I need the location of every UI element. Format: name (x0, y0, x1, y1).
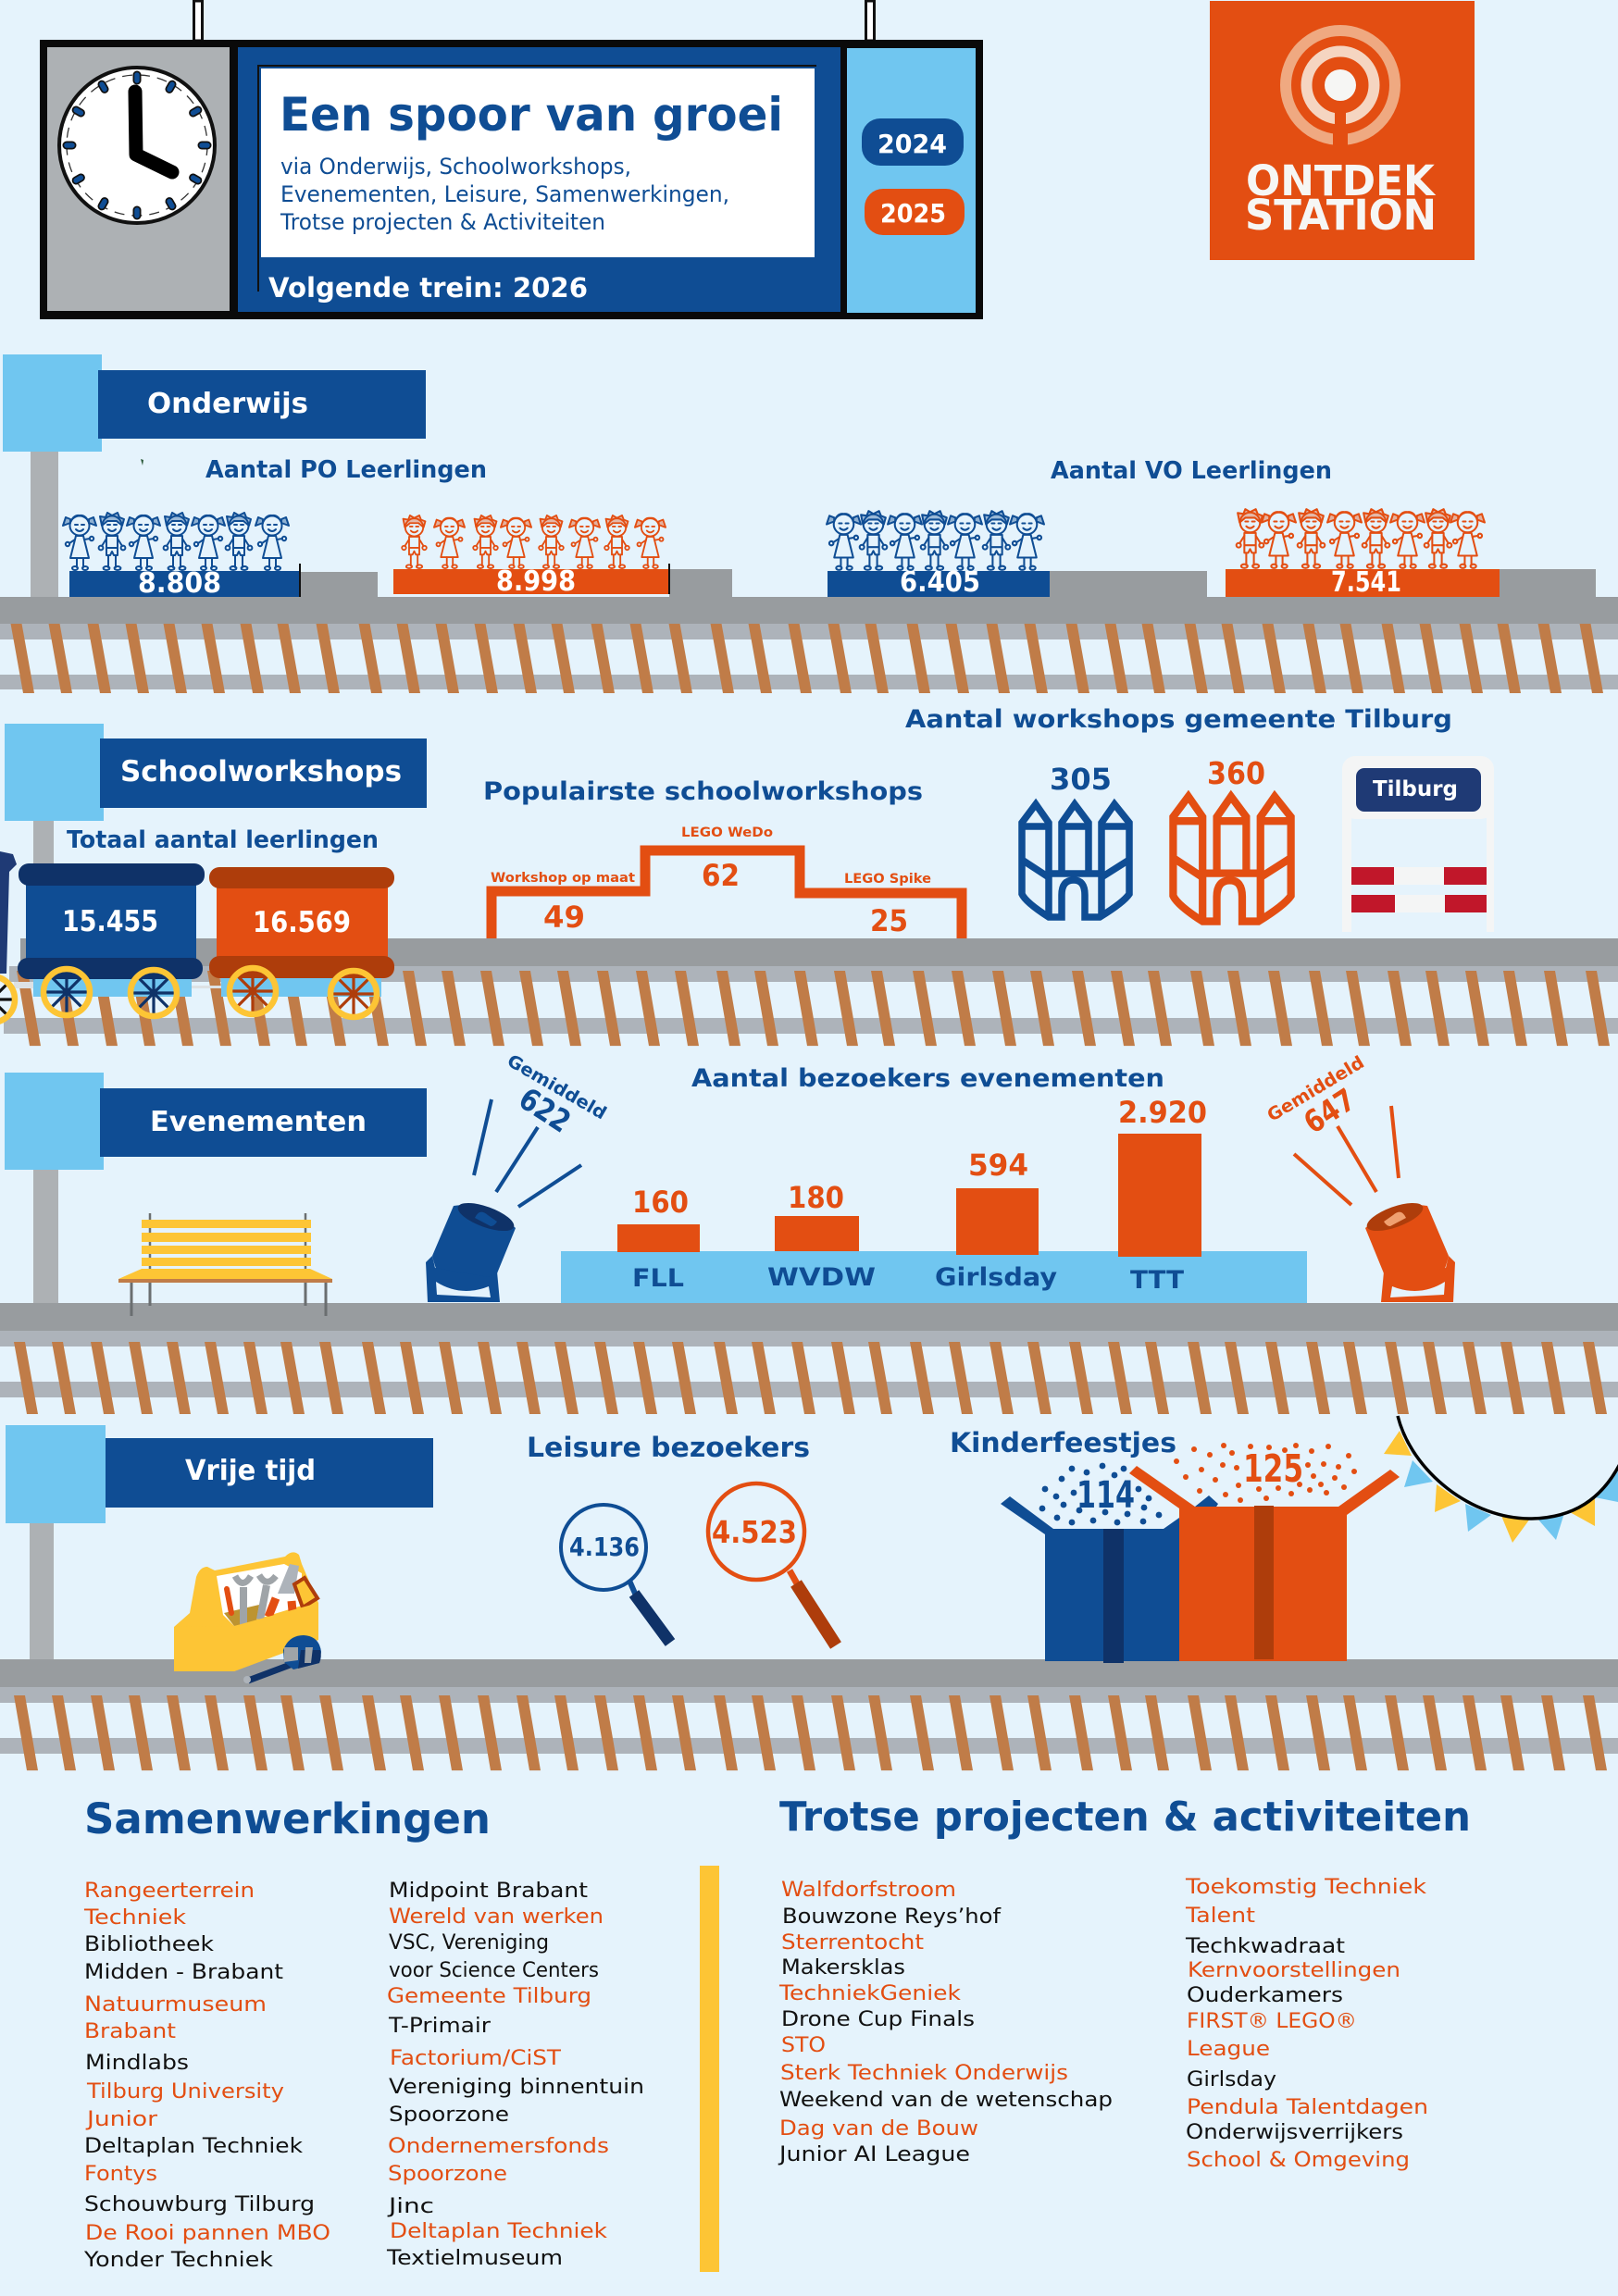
white title box (258, 66, 816, 292)
heading VO: Aantal VO Leerlingen (1051, 457, 1332, 485)
sign post (33, 821, 54, 938)
sign (3, 354, 426, 452)
list: Trotse projecten column 1: Sterrentocht (781, 1931, 924, 1955)
clock panel (47, 47, 230, 311)
list: Samenwerkingen column 2: voor Science Centers (389, 1959, 599, 1982)
heading events: Aantal bezoekers evenementen (691, 1064, 1164, 1093)
bar chart events: TTT (1130, 1266, 1185, 1295)
sign: Onderwijs (147, 388, 308, 420)
list: Trotse projecten column 1: Weekend van de wetenschap (779, 2089, 1113, 2112)
icon: magnifier orange (708, 1483, 836, 1645)
bar chart events: WVDW (767, 1263, 876, 1292)
sign (5, 724, 427, 821)
icon: magnifier orange: 4.523 (712, 1514, 797, 1550)
icon: gift blue: 114 (1077, 1474, 1135, 1517)
list: Samenwerkingen column 2: Midpoint Brabant (389, 1880, 588, 1903)
list: Trotse projecten column 2: Talent (1185, 1905, 1255, 1928)
list: Samenwerkingen column 1: Natuurmuseum (84, 1993, 267, 2017)
confetti blue (1039, 1463, 1162, 1525)
bar VO 2024: 6.405 (900, 566, 980, 599)
next train text: Volgende trein: 2026 (268, 272, 588, 304)
heading total: Totaal aantal leerlingen (67, 826, 379, 854)
bar chart events (617, 1095, 1207, 1295)
list: Samenwerkingen column 1: Bibliotheek (84, 1933, 214, 1956)
sign post (30, 1523, 54, 1659)
list: Trotse projecten column 1 (778, 1879, 1113, 2166)
bar PO 2024: 8.808 (138, 567, 221, 600)
wagon orange (209, 867, 394, 1017)
wagon blue (18, 863, 205, 1016)
bar PO 2025: 8.998 (496, 565, 576, 598)
sign (6, 1425, 433, 1523)
list: Trotse projecten column 1: STO (781, 2034, 826, 2057)
list: Samenwerkingen column 2: Textielmuseum (386, 2247, 563, 2270)
bar VO 2025 (1226, 566, 1596, 599)
list: Trotse projecten column 2: Onderwijsverrijkers (1186, 2121, 1403, 2144)
sign: Evenementen (150, 1106, 367, 1138)
label Gemiddeld blue: Gemiddeld (504, 1050, 610, 1123)
icon: bunting (1384, 1416, 1618, 1543)
list: Trotse projecten column 1: Walfdorfstroom (781, 1879, 956, 1902)
sign: Vrije tijd (185, 1455, 316, 1487)
panel: Evenementen (0, 1050, 1618, 1414)
icon: children VO 2024 (827, 511, 1044, 570)
value 360: 360 (1207, 755, 1265, 791)
icon: toolbox (174, 1552, 321, 1683)
list: Samenwerkingen column 2: T-Primair (388, 2015, 492, 2038)
label Gemiddeld orange: Gemiddeld (1263, 1052, 1368, 1126)
list: Samenwerkingen column 1: Schouwburg Tilburg (84, 2193, 315, 2216)
track (0, 1659, 1618, 1770)
divider bar (700, 1866, 719, 2272)
label Gemiddeld blue: 622 (513, 1080, 578, 1140)
podium chart: LEGO WeDo (681, 825, 773, 840)
list: Trotse projecten column 2: Techkwadraat (1185, 1935, 1345, 1958)
subtitle: via Onderwijs, Schoolworkshops, (280, 154, 631, 180)
sign (5, 1073, 427, 1170)
list: Samenwerkingen column 1: De Rooi pannen MBO (85, 2222, 330, 2245)
station sign Tilburg: Tilburg (1373, 777, 1458, 801)
bar VO 2025: 7.541 (1331, 566, 1401, 599)
list: Samenwerkingen column 1: Brabant (84, 2020, 176, 2043)
list: Trotse projecten column 2: School & Omgeving (1187, 2149, 1410, 2172)
podium chart: 62 (702, 858, 740, 893)
year panel (847, 48, 976, 313)
list: Trotse projecten column 1: Dag van de Bouw (779, 2117, 978, 2141)
list: Trotse projecten column 2: League (1187, 2038, 1270, 2061)
blue display panel (238, 47, 840, 312)
icon: children PO 2025 (402, 515, 666, 568)
podium chart: 49 (543, 900, 585, 935)
list: Samenwerkingen column 1: Deltaplan Techniek (84, 2135, 303, 2158)
panel: Schoolworkshops (0, 705, 1618, 1046)
logo: Ontdek Station: STATION (1245, 191, 1437, 240)
station sign Tilburg (1342, 756, 1494, 932)
coupling (192, 986, 223, 988)
confetti orange (1174, 1443, 1357, 1503)
list: Trotse projecten column 1: Junior AI League (778, 2143, 970, 2166)
list: Samenwerkingen column 1: Fontys (84, 2163, 157, 2186)
icon: magnifier blue (561, 1505, 670, 1643)
list: Samenwerkingen column 2: Wereld van werken (389, 1905, 604, 1929)
list: Samenwerkingen column 2: Gemeente Tilburg (387, 1985, 591, 2008)
year pill 2025: 2025 (880, 198, 946, 229)
panel: station board header (40, 1, 983, 319)
list: Samenwerkingen column 2: Factorium/CiST (390, 2047, 562, 2070)
wagon blue: 15.455 (62, 905, 158, 938)
train (0, 851, 394, 1023)
bar chart events: 2.920 (1118, 1095, 1207, 1130)
wagon orange: 16.569 (253, 906, 351, 939)
icon: spotlight blue (426, 1099, 581, 1302)
sign: Schoolworkshops (120, 755, 402, 788)
podium chart (491, 825, 962, 938)
year pill 2024: 2024 (877, 129, 947, 159)
subtitle (280, 154, 729, 235)
stage (561, 1251, 1307, 1303)
icon: gift orange (1129, 1443, 1400, 1661)
heading leisure: Leisure bezoekers (527, 1432, 810, 1463)
list: Samenwerkingen column 2 (386, 1880, 644, 2270)
list: Samenwerkingen column 1: Midden - Brabant (84, 1961, 283, 1984)
icon: gift orange: 125 (1243, 1446, 1303, 1491)
list: Samenwerkingen column 2: Ondernemersfonds (388, 2135, 609, 2158)
bar PO 2025 (393, 564, 732, 598)
subtitle: Trotse projecten & Activiteiten (280, 209, 605, 235)
value 305: 305 (1050, 762, 1112, 797)
sign post (31, 452, 58, 597)
panel: Onderwijs (0, 354, 1618, 693)
list: Trotse projecten column 2: Pendula Talentdagen (1187, 2096, 1428, 2119)
list: Samenwerkingen column 1: Rangeerterrein (84, 1880, 255, 1903)
icon: children VO 2025 (1237, 509, 1485, 568)
list: Trotse projecten column 1: Bouwzone Reys’hof (782, 1905, 1002, 1929)
list: Trotse projecten column 1: Drone Cup Finals (781, 2008, 975, 2031)
list: Trotse projecten column 1: Sterk Techniek Onderwijs (780, 2062, 1068, 2085)
bar chart events: Girlsday (935, 1263, 1057, 1292)
list: Samenwerkingen column 2: VSC, Vereniging (389, 1931, 549, 1955)
icon: gift blue (1001, 1463, 1218, 1663)
icon: bench (118, 1213, 332, 1316)
list: Samenwerkingen column 1: Techniek (83, 1906, 186, 1930)
list: Samenwerkingen column 1 (83, 1880, 330, 2272)
list: Trotse projecten column 2: FIRST® LEGO® (1187, 2010, 1357, 2033)
bar PO 2024 (69, 564, 378, 600)
icon: magnifier blue: 4.136 (569, 1532, 640, 1562)
list: Trotse projecten column 2: Toekomstig Techniek (1185, 1876, 1426, 1899)
logo: Ontdek Station (1210, 1, 1475, 260)
subtitle: Evenementen, Leisure, Samenwerkingen, (280, 181, 729, 207)
bar chart events: 160 (632, 1185, 689, 1220)
list: Trotse projecten column 2 (1185, 1876, 1428, 2172)
list: Trotse projecten column 1: Makersklas (781, 1956, 905, 1980)
track (0, 597, 1618, 693)
bar chart events: 180 (788, 1180, 844, 1215)
title: Een spoor van groei (280, 88, 783, 142)
logo: Ontdek Station: ONTDEK (1246, 156, 1437, 205)
podium chart: LEGO Spike (844, 872, 931, 887)
list: Trotse projecten column 1: TechniekGeniek (778, 1982, 961, 2005)
list: Samenwerkingen column 1: Tilburg University (86, 2080, 284, 2104)
heading PO: Aantal PO Leerlingen (205, 456, 487, 484)
list: Samenwerkingen column 1: Junior (85, 2108, 158, 2131)
podium chart: Workshop op maat (491, 871, 635, 886)
year pill 2024 (862, 118, 964, 166)
board frame (40, 40, 983, 319)
clock (59, 68, 215, 223)
speck (141, 459, 143, 465)
hanger posts (194, 1, 874, 41)
heading: Samenwerkingen: Samenwerkingen (84, 1794, 491, 1843)
list: Trotse projecten column 2: Girlsday (1187, 2068, 1276, 2091)
list: Samenwerkingen column 2: Deltaplan Techniek (390, 2220, 607, 2243)
list: Samenwerkingen column 2: Spoorzone (388, 2163, 507, 2186)
heading kinderfeestjes: Kinderfeestjes (950, 1427, 1176, 1458)
podium chart: 25 (870, 903, 908, 938)
list: Samenwerkingen column 2: Jinc (386, 2195, 434, 2218)
bar chart events: 594 (968, 1148, 1028, 1183)
list: Samenwerkingen column 2: Spoorzone (389, 2104, 509, 2127)
label Gemiddeld orange: 647 (1297, 1081, 1362, 1141)
heading popular: Populairste schoolworkshops (483, 777, 923, 806)
sign post (33, 1170, 58, 1303)
icon: crest blue (1022, 804, 1129, 917)
track (0, 1303, 1618, 1414)
list: Trotse projecten column 2: Kernvoorstellingen (1188, 1959, 1400, 1982)
year pill 2025 (865, 189, 965, 235)
heading: Trotse projecten: Trotse projecten & activiteiten (779, 1793, 1471, 1841)
list: Samenwerkingen column 1: Yonder Techniek (83, 2249, 273, 2272)
list: Trotse projecten column 2: Ouderkamers (1187, 1984, 1343, 2007)
icon: children PO 2024 (63, 513, 289, 570)
list: Samenwerkingen column 2: Vereniging binnentuin (389, 2076, 644, 2099)
icon: spotlight orange (1294, 1106, 1455, 1302)
track (4, 938, 1618, 1046)
locomotive (0, 851, 33, 1023)
panel: Vrije tijd (0, 1416, 1618, 1770)
bar VO 2024 (828, 566, 1207, 599)
bar chart events: FLL (632, 1264, 684, 1293)
list: Samenwerkingen column 1: Mindlabs (85, 2052, 189, 2075)
heading municipality: Aantal workshops gemeente Tilburg (905, 705, 1452, 734)
icon: crest orange (1173, 797, 1291, 922)
